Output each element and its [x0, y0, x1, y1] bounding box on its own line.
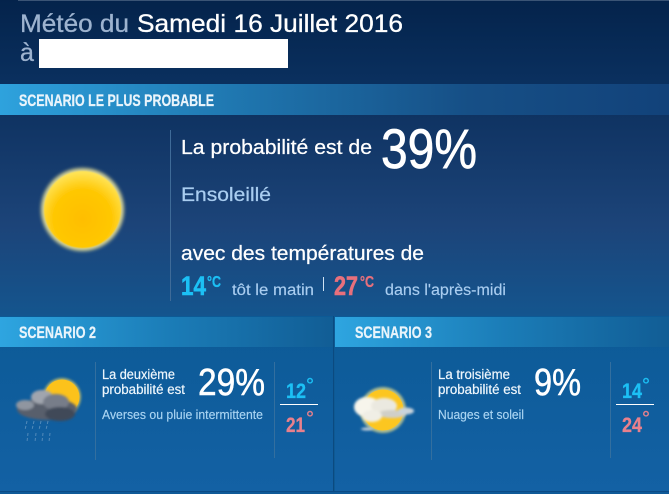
heading: scenario 3: SCENARIO 3 [355, 324, 432, 342]
title: Météo du [20, 10, 129, 38]
panel: scenario 3 [335, 316, 669, 491]
probability value: 39% [381, 117, 477, 180]
condition: Nuages et soleil [438, 408, 524, 422]
condition: Ensoleillé [181, 185, 271, 206]
probability label: La deuxième [102, 367, 175, 382]
temperature intro: avec des températures de [181, 243, 424, 265]
morning temperature: tôt le matin [232, 282, 314, 299]
probability label [102, 367, 185, 397]
temperatures [280, 375, 318, 437]
afternoon temperature [334, 271, 506, 301]
afternoon temperature: dans l'après-midi [385, 282, 506, 299]
icon: cloud, sun and rain [16, 378, 81, 442]
morning temperature [181, 271, 314, 301]
temperatures: 24 [622, 414, 642, 437]
probability label: La troisième [438, 367, 510, 382]
morning temperature: °C [207, 274, 221, 291]
temperatures: 14 [622, 380, 642, 403]
heading: main scenario: SCENARIO LE PLUS PROBABLE [19, 92, 214, 110]
probability label: probabilité est [438, 382, 521, 397]
temperatures: ° [642, 408, 650, 430]
icon: sun [41, 168, 124, 251]
temperatures: ° [306, 408, 314, 430]
probability label: probabilité est [102, 382, 185, 397]
icon: sun and clouds [354, 387, 414, 433]
panel: main scenario [0, 84, 669, 316]
probability value: 29% [198, 362, 265, 404]
condition: Averses ou pluie intermittente [102, 408, 263, 422]
redacted location [39, 39, 288, 68]
title: Samedi 16 Juillet 2016 [137, 10, 403, 38]
morning temperature: 14 [181, 271, 206, 301]
temperatures: 12 [286, 380, 306, 403]
afternoon temperature: 27 [334, 271, 358, 301]
panel: scenario 2 [0, 316, 334, 491]
probability label [438, 367, 521, 397]
temperatures: ° [306, 375, 314, 397]
heading: scenario 2: SCENARIO 2 [19, 324, 96, 342]
probability text: La probabilité est de [181, 137, 372, 159]
panel: header [0, 0, 669, 84]
probability value: 9% [534, 362, 581, 404]
temperatures [616, 375, 654, 437]
afternoon temperature: °C [360, 274, 374, 291]
location label: à [20, 39, 34, 67]
temperatures: ° [642, 375, 650, 397]
temperatures: 21 [286, 414, 305, 437]
